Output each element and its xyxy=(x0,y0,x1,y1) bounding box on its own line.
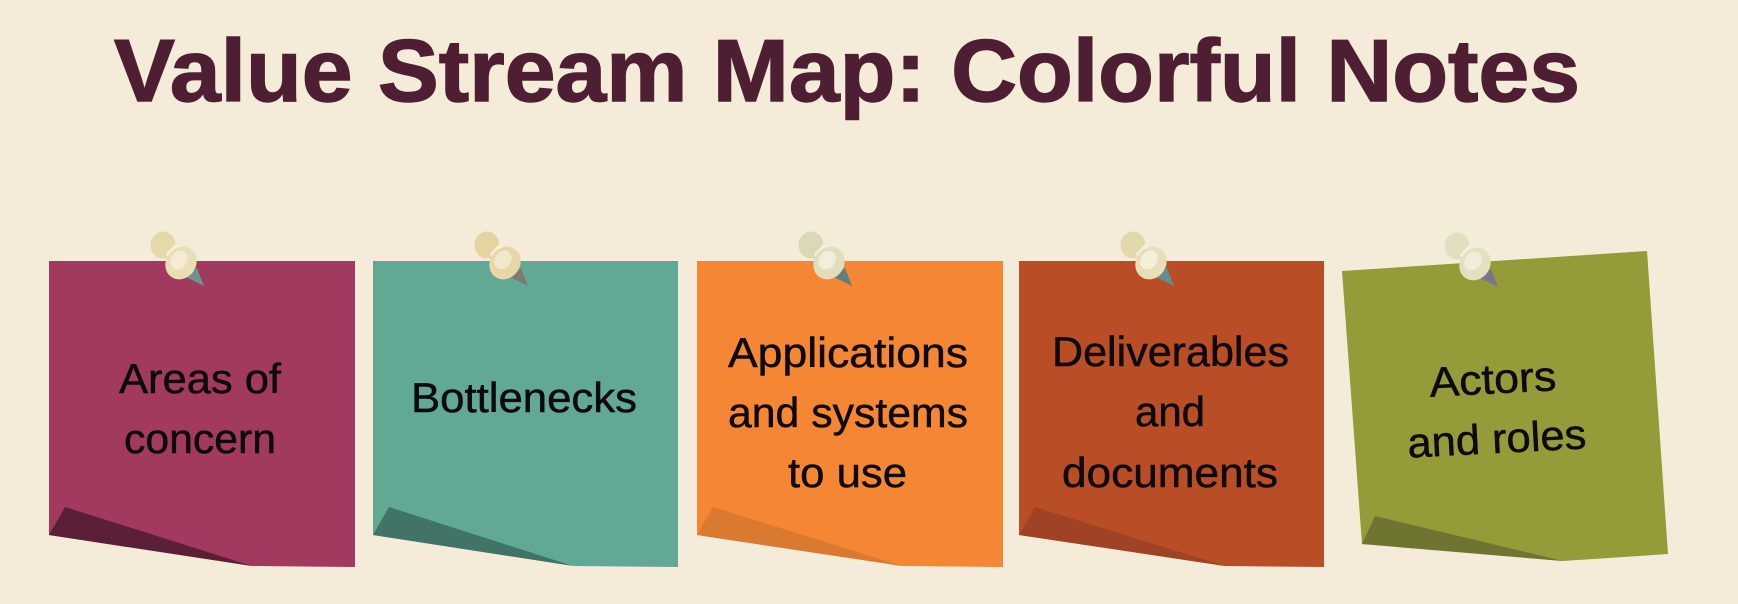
note label: Areas of xyxy=(119,355,281,402)
note body teal xyxy=(373,261,678,567)
folded corner xyxy=(1019,507,1225,566)
icon: push pin xyxy=(474,232,528,286)
panel: areas of concern note xyxy=(49,232,355,567)
icon: push pin xyxy=(150,232,204,286)
panel: deliverables and documents note xyxy=(1019,232,1324,567)
panel: applications and systems note xyxy=(697,232,1003,567)
folded corner xyxy=(1362,516,1563,561)
note label: Applications xyxy=(728,329,968,376)
note body orange xyxy=(697,261,1003,567)
note label xyxy=(1052,328,1289,496)
note label: and xyxy=(1135,388,1205,435)
icon: push pin xyxy=(798,232,852,286)
note label: documents xyxy=(1062,449,1278,496)
note body rust xyxy=(1019,261,1324,567)
folded corner xyxy=(697,507,902,566)
note label xyxy=(728,329,968,496)
icon: push pin xyxy=(1120,232,1174,286)
note body magenta xyxy=(49,261,355,567)
note label xyxy=(1406,352,1587,467)
note label: concern xyxy=(124,415,276,462)
note label: and systems xyxy=(728,389,968,436)
folded corner xyxy=(49,507,252,566)
note label: and roles xyxy=(1406,410,1587,467)
note label: Deliverables xyxy=(1052,328,1289,375)
note label: Bottlenecks xyxy=(411,374,637,421)
note label: Actors xyxy=(1428,352,1557,406)
note label: to use xyxy=(788,449,907,496)
panel: bottlenecks note xyxy=(373,232,678,567)
note body olive xyxy=(1342,251,1668,561)
icon: push pin xyxy=(1444,232,1498,287)
folded corner xyxy=(373,507,573,566)
title: Value Stream Map: Colorful Notes xyxy=(114,21,1580,120)
panel: actors and roles note xyxy=(1342,232,1668,561)
note label xyxy=(119,355,281,462)
